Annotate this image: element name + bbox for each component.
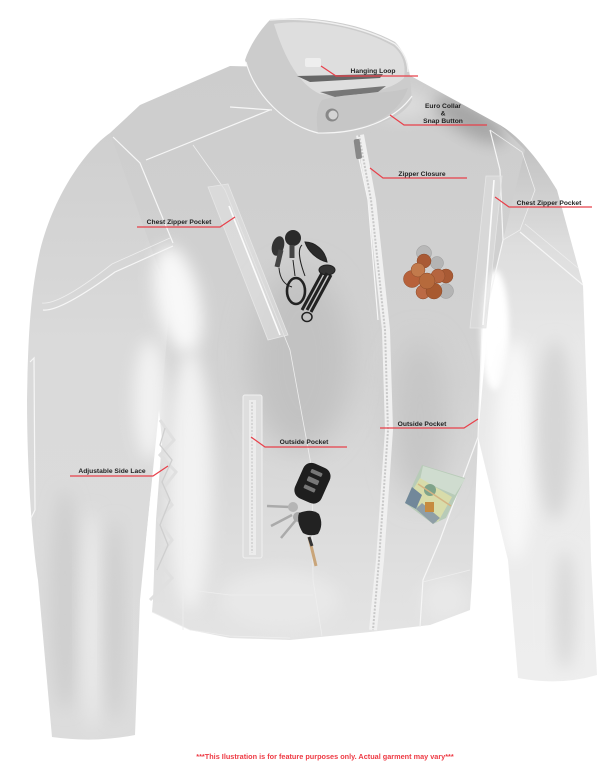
callout: left chest zipper pocket: Chest Zipper Pocket	[147, 219, 212, 226]
inner collar dark stripes	[297, 74, 383, 82]
left chest zipper pocket	[208, 184, 288, 340]
center zipper	[353, 135, 389, 630]
callout: euro collar and snap button: &	[441, 110, 446, 118]
callout: adjustable side lace	[70, 466, 168, 476]
shading	[50, 88, 575, 730]
callout: right chest zipper pocket: Chest Zipper Pocket	[517, 200, 582, 207]
callout: right chest zipper pocket	[495, 197, 592, 207]
callout: hanging loop: Hanging Loop	[351, 68, 395, 75]
callout: left outside pocket: Outside Pocket	[280, 439, 329, 446]
callout: euro collar and snap button: Euro Collar	[425, 103, 461, 110]
outside pocket zipper	[243, 395, 262, 558]
seams	[30, 110, 583, 680]
callout: right outside pocket: Outside Pocket	[398, 421, 447, 428]
left sleeve	[27, 133, 200, 740]
callout: euro collar and snap button	[390, 103, 487, 125]
callout: euro collar and snap button: Snap Button	[423, 118, 463, 125]
collar flap	[317, 88, 408, 133]
callout: zipper closure: Zipper Closure	[398, 171, 446, 178]
collar tag	[305, 58, 321, 67]
icon: earphones	[270, 230, 335, 322]
callout: zipper closure	[370, 168, 467, 178]
callout: left chest zipper pocket	[137, 217, 235, 227]
callout: left outside pocket	[251, 437, 347, 447]
icon: coins	[404, 246, 454, 299]
callout: adjustable side lace: Adjustable Side Lace	[78, 468, 146, 475]
right chest zipper pocket	[470, 176, 502, 328]
callout: hanging loop	[321, 66, 418, 76]
side lacing	[142, 410, 176, 612]
jacket body	[110, 66, 525, 640]
icon: car keys	[267, 460, 333, 566]
snap button	[326, 108, 338, 122]
footer disclaimer: ***This Ilustration is for feature purposes only. Actual garment may vary***	[196, 752, 454, 761]
right sleeve	[478, 125, 597, 681]
collar	[230, 18, 412, 134]
callout: right outside pocket	[380, 419, 478, 428]
icon: money roll	[405, 465, 465, 524]
